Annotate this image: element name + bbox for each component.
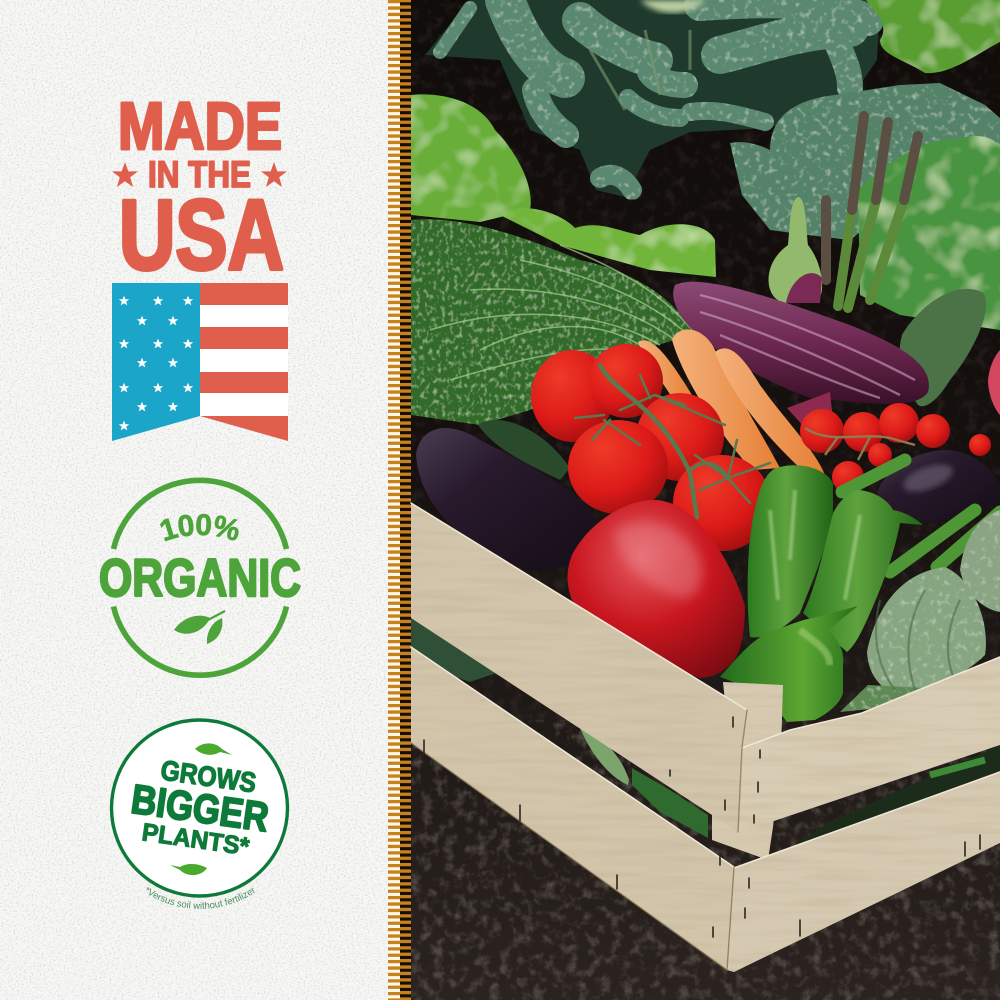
green peppers xyxy=(720,465,923,722)
text: GROWS: GROWS xyxy=(159,754,258,798)
ring: top arc xyxy=(114,480,286,549)
circle seal xyxy=(112,720,288,896)
heading: IN THE: IN THE xyxy=(148,154,251,195)
footnote: *Versus soil without fertilizer xyxy=(146,887,255,909)
badge: made in the USA xyxy=(112,89,288,441)
text: BIGGER: BIGGER xyxy=(128,776,272,840)
asparagus and herbs xyxy=(768,116,1000,330)
photo: vegetable crate on soil xyxy=(411,0,1000,1000)
icon: left star xyxy=(112,162,138,187)
cherry tomatoes xyxy=(800,403,991,493)
pepper highlight xyxy=(615,522,702,598)
badge: 100% organic xyxy=(99,478,301,678)
carrot greens xyxy=(411,219,692,425)
cucumber xyxy=(900,289,986,406)
panel: fabric background xyxy=(0,0,390,1000)
lettuce left xyxy=(411,94,531,222)
heading: ORGANIC: ORGANIC xyxy=(99,549,301,608)
icon: bottom leaf xyxy=(170,864,207,875)
striped eggplant xyxy=(673,282,929,404)
badge: grows bigger plants xyxy=(110,718,290,909)
savoy cabbage top xyxy=(425,0,880,197)
icon: leaves xyxy=(174,611,225,644)
large dark eggplant xyxy=(416,428,598,571)
crate: right upper slat xyxy=(738,657,1000,833)
seal text xyxy=(125,751,275,863)
icon: right star xyxy=(261,162,287,187)
crate: left upper slat xyxy=(411,503,747,832)
dark cucumber behind tomatoes xyxy=(478,420,570,480)
red bell pepper xyxy=(568,500,745,678)
small dark eggplant xyxy=(877,450,1000,523)
crate: right lower slat xyxy=(727,772,1000,972)
artichoke shading xyxy=(876,590,960,690)
crate: corner post xyxy=(712,682,783,860)
text: PLANTS*: PLANTS* xyxy=(140,818,251,861)
crate: left lower slat xyxy=(411,647,734,970)
baby eggplant xyxy=(768,197,822,303)
icon: top leaf xyxy=(195,743,232,755)
radish xyxy=(988,350,1000,415)
heading: MADE: MADE xyxy=(118,89,282,164)
soil background xyxy=(411,0,1000,1000)
lettuce lower xyxy=(500,208,716,277)
icon: American flag banner xyxy=(112,283,288,441)
lettuce top right xyxy=(866,0,1000,73)
savoy cabbage right xyxy=(730,83,1000,240)
ring: bottom arc xyxy=(114,606,286,675)
divider: stitched orange ribbon xyxy=(388,0,411,1000)
tomatoes xyxy=(531,344,771,551)
green beans xyxy=(842,460,1000,572)
artichokes xyxy=(840,510,1000,712)
crate edges and staples xyxy=(411,503,1000,970)
carrots xyxy=(638,329,825,475)
text: 100%: 100% xyxy=(160,514,239,542)
radicchio accent xyxy=(787,392,833,428)
heading: USA: USA xyxy=(119,179,284,290)
crate interior greens xyxy=(411,618,1000,858)
